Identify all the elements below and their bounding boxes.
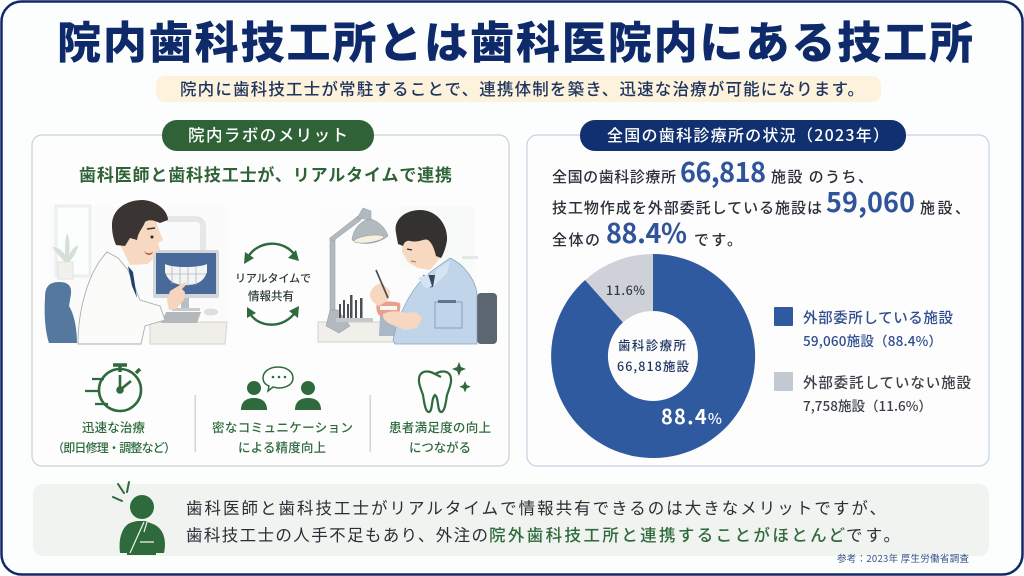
icon: thinking person <box>113 482 165 555</box>
donut chart: 66,818施設 <box>617 356 689 375</box>
summary text: 66,818 <box>680 151 766 190</box>
icon: sparkling tooth <box>419 362 471 412</box>
benefit: patient satisfaction: につながる <box>409 437 471 456</box>
donut chart <box>551 254 755 458</box>
model on stand <box>379 316 396 336</box>
summary text: です。 <box>694 229 742 250</box>
tab heading: status <box>580 120 906 151</box>
summary text: 全国の歯科診療所 <box>552 166 676 187</box>
subtitle band: 院内に歯科技工士が常駐することで、連携体制を築き、迅速な治療が可能になります。 <box>180 76 864 100</box>
benefit: close communication <box>212 367 353 456</box>
benefit: fast treatment: （即日修理・調整など） <box>52 439 176 456</box>
note text <box>186 495 900 546</box>
arrows and label: realtime sharing: 情報共有 <box>248 288 294 304</box>
donut chart: 歯科診療所 <box>618 335 686 354</box>
tab heading: merits <box>162 120 374 151</box>
technician figure <box>370 210 477 344</box>
donut chart: 88.4% <box>661 401 722 430</box>
illustration: dentist at monitor <box>45 200 228 344</box>
note text: 院外歯科技工所と連携することがほとんど <box>489 522 846 546</box>
summary text: 59,060 <box>826 181 915 220</box>
desk <box>150 322 227 344</box>
keyboard <box>161 312 201 323</box>
benefit: patient satisfaction <box>389 362 491 456</box>
note text: 歯科医師と歯科技工士がリアルタイムで情報共有できるのは大きなメリットですが、 <box>186 495 886 519</box>
summary text: 88.4% <box>606 212 687 251</box>
icon: two people talking <box>241 367 321 410</box>
note text: です。 <box>846 522 900 546</box>
illustration: dental technician at bench <box>318 206 497 344</box>
lamp <box>326 208 388 333</box>
benefit: close communication: 密なコミュニケーション <box>212 417 353 436</box>
dental chair <box>45 282 77 343</box>
note text: 歯科技工士の人手不足もあり、外注の <box>186 522 488 546</box>
benefit: fast treatment: 迅速な治療 <box>82 417 145 436</box>
panel: in-house lab merits <box>32 120 509 466</box>
title: 院内歯科技工所とは歯科医院内にある技工所 <box>57 7 973 71</box>
benefit: close communication: による精度向上 <box>238 437 326 456</box>
tools rack <box>336 295 373 322</box>
arrows and label: realtime sharing <box>235 244 311 325</box>
panel subheading: 歯科医師と歯科技工士が、リアルタイムで連携 <box>79 161 452 186</box>
chair back <box>477 293 497 344</box>
legend: 7,758施設（11.6%） <box>803 395 932 415</box>
summary text: 施設 のうち、 <box>771 166 873 187</box>
tab heading: merits: 院内ラボのメリット <box>188 122 348 146</box>
summary text <box>552 151 970 251</box>
donut chart: 11.6% <box>606 280 645 299</box>
arrows and label: realtime sharing: リアルタイムで <box>235 270 311 286</box>
summary text: 技工物作成を外部委託している施設は <box>552 197 822 218</box>
legend: 外部委所している施設 <box>803 307 954 328</box>
monitor <box>153 250 219 311</box>
tab heading: status: 全国の歯科診療所の状況（2023年） <box>607 122 889 146</box>
legend <box>774 307 972 415</box>
bottom note band <box>33 482 989 556</box>
plant <box>52 233 78 279</box>
benefit: patient satisfaction: 患者満足度の向上 <box>389 417 491 436</box>
source note: 参考：2023年 厚生労働省調査 <box>837 551 969 565</box>
benefit: fast treatment <box>52 365 176 456</box>
dentist figure <box>78 200 187 344</box>
legend: 外部委託していない施設 <box>803 372 972 393</box>
panel: national clinic status <box>527 120 989 466</box>
summary text: 施設、 <box>920 197 970 218</box>
icon: stopwatch <box>85 365 141 411</box>
bench <box>318 322 420 342</box>
legend: 59,060施設（88.4%） <box>803 330 942 350</box>
summary text: 全体の <box>552 229 600 250</box>
